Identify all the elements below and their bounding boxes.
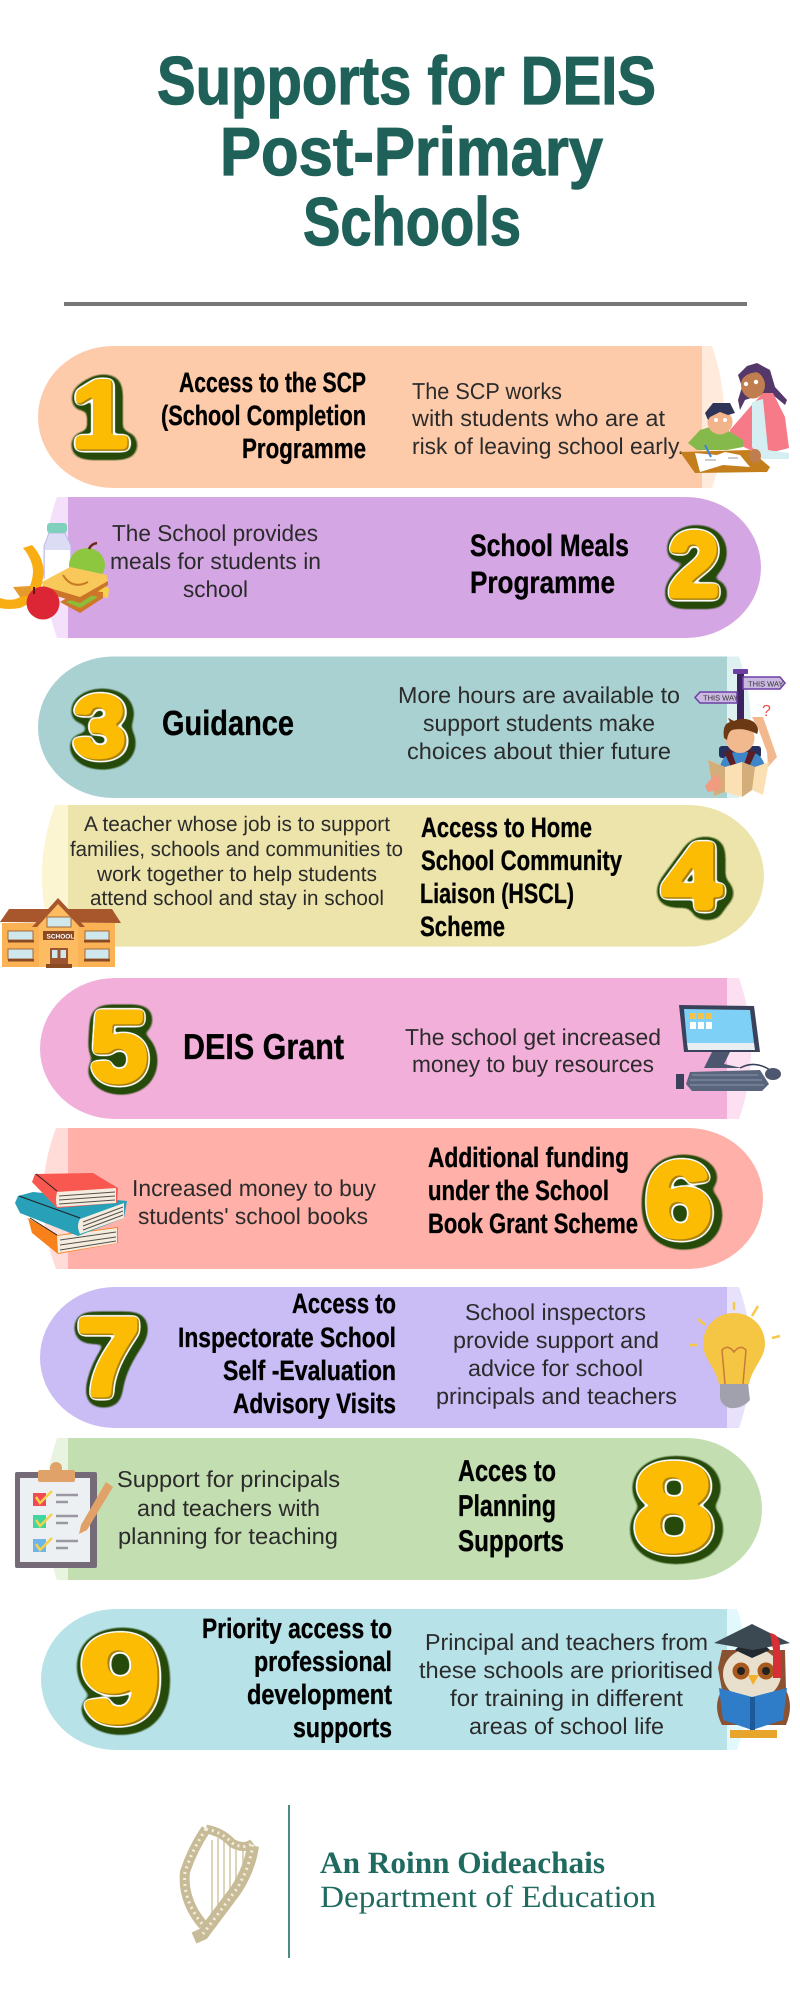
description 9: for training in different bbox=[450, 1685, 684, 1711]
pill 5 background bbox=[40, 978, 751, 1119]
number 1: 1 bbox=[72, 362, 129, 469]
icon: Irish harp bbox=[185, 1829, 253, 1938]
heading 3: Guidance bbox=[162, 704, 294, 743]
pill 1 background bbox=[38, 346, 724, 488]
pill 4 background bbox=[42, 805, 764, 947]
icon: owl with graduation cap and book bbox=[714, 1624, 790, 1738]
heading 7: Inspectorate School bbox=[178, 1322, 396, 1353]
description 7: advice for school bbox=[468, 1355, 643, 1381]
panel: 7 Inspectorate bbox=[40, 1287, 780, 1428]
icon: stack of books bbox=[15, 1173, 127, 1254]
heading 9: professional bbox=[254, 1646, 392, 1677]
panel: 8 Planning bbox=[15, 1438, 762, 1580]
description 3: support students make bbox=[423, 710, 655, 736]
title: Post-Primary bbox=[220, 114, 603, 190]
description 7: principals and teachers bbox=[436, 1383, 677, 1409]
description 2: meals for students in bbox=[110, 548, 321, 574]
heading 1 bbox=[161, 367, 366, 464]
description 4: families, schools and communities to bbox=[70, 838, 403, 861]
heading 1: Programme bbox=[242, 433, 366, 464]
heading 7: Access to bbox=[292, 1288, 396, 1319]
description 8: Support for principals bbox=[117, 1466, 340, 1492]
number 9: 9 bbox=[81, 1611, 161, 1749]
heading 9: Priority access to bbox=[202, 1613, 392, 1644]
heading 4: Access to Home bbox=[421, 812, 592, 843]
description 7: School inspectors bbox=[465, 1299, 646, 1325]
heading 7: Advisory Visits bbox=[233, 1388, 396, 1419]
description 4: work together to help students bbox=[96, 863, 377, 886]
number 5: 5 bbox=[91, 992, 148, 1104]
description 1 bbox=[411, 378, 684, 459]
panel: 2 School Meals bbox=[0, 497, 761, 638]
icon: school building bbox=[0, 898, 121, 968]
heading 2: School Meals bbox=[470, 528, 629, 563]
heading 4 bbox=[420, 812, 622, 942]
description 8: and teachers with bbox=[137, 1495, 320, 1521]
heading 2 bbox=[470, 528, 629, 600]
heading 1: Access to the SCP bbox=[179, 367, 366, 398]
heading 2: Programme bbox=[470, 565, 615, 600]
icon: desktop computer bbox=[676, 1005, 781, 1091]
heading 6 bbox=[428, 1142, 638, 1239]
description 4: attend school and stay in school bbox=[90, 887, 384, 910]
icon: boy at signpost bbox=[695, 669, 785, 797]
heading 6: Additional funding bbox=[428, 1142, 629, 1173]
description 6: Increased money to buy bbox=[132, 1175, 376, 1201]
panel: 5 DEIS Grant bbox=[40, 978, 781, 1119]
icon: clipboard checklist bbox=[15, 1462, 113, 1568]
description 6 bbox=[132, 1175, 376, 1229]
icon: boy at signpost: ? bbox=[762, 703, 771, 720]
number 3: 3 bbox=[74, 679, 127, 776]
description 2 bbox=[110, 520, 321, 602]
heading 1: (School Completion bbox=[161, 400, 366, 431]
description 1: The SCP works bbox=[412, 378, 562, 404]
heading 9: supports bbox=[293, 1712, 392, 1743]
department name: An Roinn Oideachais bbox=[320, 1845, 605, 1880]
description 5 bbox=[405, 1024, 661, 1077]
panel: 9 Professional development bbox=[41, 1609, 790, 1750]
icon: light bulb bbox=[690, 1302, 780, 1408]
heading 4: Liaison (HSCL) bbox=[420, 878, 574, 909]
description 7: provide support and bbox=[453, 1327, 659, 1353]
description 5: The school get increased bbox=[405, 1024, 661, 1050]
description 4 bbox=[70, 813, 403, 910]
description 5: money to buy resources bbox=[412, 1051, 654, 1077]
number 7: 7 bbox=[77, 1296, 141, 1420]
pill 6 background bbox=[43, 1128, 763, 1269]
heading 8: Acces to bbox=[458, 1455, 556, 1488]
heading 6: under the School bbox=[428, 1175, 609, 1206]
pill 9 background bbox=[41, 1609, 749, 1750]
icon: boy at signpost: THIS WAY bbox=[703, 694, 738, 702]
number 4: 4 bbox=[663, 824, 722, 929]
description 8: planning for teaching bbox=[118, 1523, 338, 1549]
number 8: 8 bbox=[634, 1439, 714, 1578]
pill 7 background bbox=[40, 1287, 751, 1428]
description 2: school bbox=[183, 576, 248, 602]
heading 7: Self -Evaluation bbox=[223, 1355, 396, 1386]
icon: teacher helping student bbox=[680, 363, 789, 473]
panel: 6 School Books bbox=[15, 1128, 763, 1269]
description 1: risk of leaving school early. bbox=[412, 433, 684, 459]
description 9 bbox=[419, 1629, 713, 1739]
heading 6: Book Grant Scheme bbox=[428, 1208, 638, 1239]
pill 3 background bbox=[38, 656, 751, 798]
department name bbox=[320, 1845, 657, 1914]
heading 7 bbox=[178, 1288, 396, 1419]
title: Supports for DEIS bbox=[157, 43, 656, 119]
description 7 bbox=[436, 1299, 677, 1409]
description 3: choices about thier future bbox=[407, 738, 671, 764]
description 2: The School provides bbox=[112, 520, 318, 546]
description 1: with students who are at bbox=[411, 405, 666, 431]
number 2: 2 bbox=[669, 515, 720, 617]
pill 8 background bbox=[45, 1438, 762, 1580]
icon: boy at signpost: THIS WAY bbox=[748, 680, 783, 688]
description 9: these schools are prioritised bbox=[419, 1657, 713, 1683]
panel: 4 HSCL bbox=[0, 805, 764, 968]
heading 8 bbox=[458, 1455, 564, 1558]
number 6: 6 bbox=[646, 1140, 713, 1260]
heading 8: Supports bbox=[458, 1525, 564, 1558]
description 4: A teacher whose job is to support bbox=[84, 813, 390, 836]
heading 4: Scheme bbox=[420, 911, 505, 942]
description 9: areas of school life bbox=[469, 1713, 664, 1739]
footer logo bbox=[185, 1805, 657, 1958]
panel: 1 SCP bbox=[38, 346, 789, 488]
heading 9 bbox=[202, 1613, 392, 1743]
description 9: Principal and teachers from bbox=[425, 1629, 708, 1655]
icon: lunch food bbox=[0, 523, 109, 620]
description 6: students' school books bbox=[138, 1203, 368, 1229]
department name: Department of Education bbox=[320, 1879, 657, 1914]
heading 9: development bbox=[247, 1679, 392, 1710]
icon: school building: SCHOOL bbox=[46, 934, 74, 940]
description 3: More hours are available to bbox=[398, 682, 680, 708]
heading 8: Planning bbox=[458, 1490, 556, 1523]
heading 5: DEIS Grant bbox=[183, 1026, 344, 1067]
description 8 bbox=[117, 1466, 340, 1549]
title: Schools bbox=[303, 184, 521, 260]
panel: 3 Guidance bbox=[38, 656, 785, 798]
pill 2 background bbox=[45, 497, 761, 638]
description 3 bbox=[398, 682, 680, 764]
heading 4: School Community bbox=[421, 845, 622, 876]
title bbox=[157, 43, 656, 260]
